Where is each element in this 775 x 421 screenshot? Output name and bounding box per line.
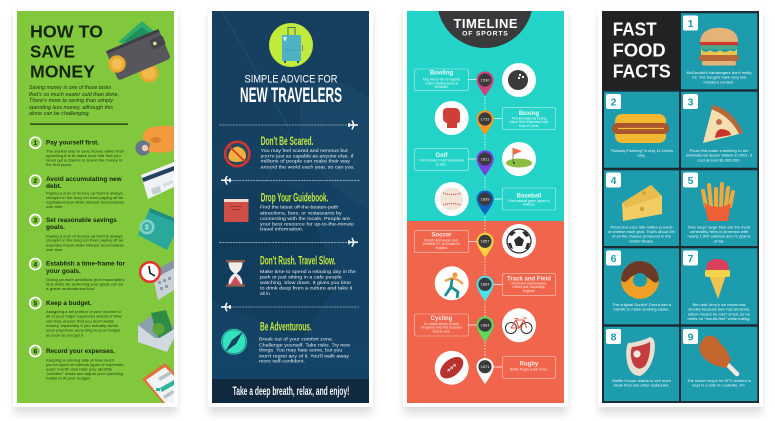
fact 8: steak [604, 327, 679, 401]
event: bowling 1530: Whitehall. [434, 85, 449, 89]
title badge: TIMELINE [454, 16, 518, 31]
tip 4: be adventurous: Challenge yourself. Take risks. Try new [259, 342, 350, 347]
fact 1: burger: McDonald's hamburgers don't really [686, 71, 752, 75]
step 5: 5 [33, 300, 37, 307]
event: soccer 1857: 1857 [481, 239, 490, 244]
fact 3: pizza [681, 92, 757, 168]
fact 6: donut: handle to make dunking easier. [614, 308, 670, 312]
tip 1: don't be scared: Don't Be Scared. [261, 134, 313, 148]
event: baseball 1839: 1839 [481, 196, 490, 201]
event: bowling 1530: 1530 [481, 77, 490, 82]
flight path 1 [219, 120, 358, 130]
fact 2: hot dog: 2 [611, 96, 617, 108]
fact 8: steak: 8 [611, 332, 617, 344]
fact 7: ice cream [681, 248, 757, 324]
step 5: all of your major expenses ahead of time [46, 315, 122, 319]
title: SIMPLE ADVICE FOR [244, 74, 338, 86]
fact 9: chicken: kept in a safe in Louisville, KY. [692, 384, 746, 388]
fact 3: pizza: cost around $1,000,000. [698, 158, 740, 162]
fact 4: cheese: 4 [611, 175, 617, 187]
tip 1: don't be scared [261, 134, 355, 170]
event: baseball 1839 [435, 182, 556, 216]
event: golf 1811: 1811 [481, 156, 490, 161]
tip 3: don't rush: park or just sitting in a cafe people [260, 274, 343, 279]
icon: compass [221, 328, 247, 355]
step 3: over time. [46, 248, 63, 252]
event: cycling 1864: Cycling [431, 316, 453, 322]
step 4: your goals. [46, 268, 81, 275]
step 3: Paying a sum of money up-front is always [46, 234, 123, 238]
fact 5: fries: unhealthy fries in America with [690, 230, 748, 234]
fact 3: pizza: Pizza Hut made a delivery to the [690, 149, 748, 153]
event: rugby 1871 [435, 351, 556, 385]
panel: how to save money [13, 7, 178, 407]
icon: money folder [138, 208, 174, 250]
step 5: can help ensure that you don't waste [46, 319, 114, 323]
event: bowling 1530: King Henry VIII of England [423, 77, 461, 81]
step 3: cheaper in the long run than paying off an [46, 239, 123, 243]
step 5: money, especially if you actually divide [46, 324, 118, 328]
event: track and field 1864: England. [523, 289, 535, 293]
step 3: 3 [33, 217, 37, 224]
fact 4: cheese: of all the cheese produced in the [612, 235, 671, 239]
event: golf 1811: First Women's Golf Tournament [419, 158, 464, 162]
intro text: that's so much easier said than done. [29, 92, 119, 98]
event: track and field 1864: First track meet between [512, 282, 547, 286]
step 1: Pay yourself first. [46, 139, 99, 146]
step 5: each paycheck according to your budget [46, 329, 121, 333]
step 6: habits to fit your budget. [46, 377, 91, 381]
icon: guidebook [224, 199, 248, 222]
fact 5: fries: nearly 1,500 calories and 71 grams [688, 235, 751, 239]
icon: credit card [141, 162, 174, 199]
intro text: There's more to saving than simply [29, 98, 113, 104]
event: soccer 1857 [415, 224, 536, 258]
tip 1: don't be scared: around the world each year, so can you. [261, 165, 355, 170]
event: boxing 1733: Fists of Cards. [519, 124, 539, 128]
step 3 [30, 214, 124, 252]
event: rugby 1871: 1871 [481, 364, 490, 369]
tip 2: drop your guidebook: your best resource for up-to-the-minute [260, 221, 355, 226]
event: soccer 1857: England. [435, 246, 448, 250]
event: golf 1811: in 1811. [436, 162, 447, 166]
title: MONEY [30, 61, 95, 81]
event: boxing 1733: 1733 [481, 116, 490, 121]
step 4: a great motivational tool. [46, 287, 96, 291]
tip 1: don't be scared: millions of people can make their way [261, 159, 351, 164]
intro text: Saving money is one of those tasks [29, 85, 111, 91]
flight path 2 [221, 176, 360, 185]
step 1: spending it is to make sure that that you [46, 154, 121, 158]
step 6: "problem" areas and adjust your spending [46, 372, 123, 376]
event: track and field 1864 [435, 266, 556, 301]
fact 9: chicken: The secret recipe for KFC chicken is [687, 379, 751, 383]
fact 3: pizza: 3 [688, 96, 694, 108]
step 1 [30, 137, 124, 167]
fact 9: chicken [681, 327, 757, 401]
icon: hand with coin [135, 126, 174, 156]
step 6: 6 [33, 348, 37, 355]
event: track and field 1864: 1864 [481, 282, 490, 287]
step 1: never get a chance to spend the money in [46, 159, 122, 163]
step 5: Keep a budget. [46, 300, 92, 307]
panel: advice for new travelers [208, 7, 373, 407]
step 6: each month can help you identify [46, 367, 112, 371]
fact 5: fries: 5 [688, 175, 694, 187]
event: cycling 1864: 1864 [481, 322, 490, 327]
fact 6: donut [604, 248, 679, 324]
event: golf 1811: Golf [436, 153, 448, 159]
fact 7: ice cream: which means he can't smell, so he [688, 312, 750, 316]
flight path 4 [221, 303, 359, 311]
step 2: Paying a sum of money up-front is always [46, 192, 123, 196]
title [240, 74, 342, 107]
icon: clock and calendar [140, 260, 174, 300]
title: SAVE [30, 41, 75, 61]
icon: hourglass [226, 260, 245, 287]
step 4: 4 [33, 261, 37, 268]
icon: money folder: $ [145, 224, 149, 232]
event: rugby 1871: British Rugby Union forms. [510, 368, 548, 372]
step 2: Avoid accumulating new [46, 176, 122, 183]
step 4 [30, 258, 126, 291]
step 2: debt. [46, 183, 62, 190]
tip 4: be adventurous: things. You may hate some, but you [259, 348, 342, 353]
fact 5: fries: Five Guys' large fries are the most [688, 225, 750, 229]
event: rugby 1871: Rugby [520, 361, 539, 367]
fact 4: cheese: of cheese each year. That's about 3% [608, 230, 676, 234]
event: bowling 1530: orders bowling lanes at [425, 81, 458, 85]
event: track and field 1864: Oxford and Cambridge, [512, 285, 546, 289]
title: FAST [613, 20, 657, 40]
fact 7: ice cream: 7 [688, 253, 694, 265]
event: cycling 1864 [415, 308, 536, 342]
fact 2: hot dog: long. [638, 154, 646, 158]
step 6: Keeping a running tally of how much [46, 358, 114, 362]
fact 1: burger: rot. The burgers have very low [692, 76, 746, 80]
intro text [29, 85, 119, 117]
title: FOOD [613, 41, 666, 61]
title badge: OF SPORTS [462, 30, 508, 37]
intro text: spending less money, although this [29, 105, 113, 111]
step 2: over time. [46, 205, 63, 209]
step 2 [30, 175, 124, 209]
event: boxing 1733 [435, 101, 556, 135]
icon: wallet [106, 21, 172, 82]
fact 8: steak: steak than any other restaurant. [614, 384, 670, 388]
step 4: Giving yourself ambitious (but reasonable) [46, 278, 125, 282]
fact 7: ice cream: chunks because Ben has anosmia, [688, 308, 750, 312]
event: boxing 1733: match: Bell-Whitehead bout, [509, 120, 549, 124]
panel: timeline of sports [403, 7, 568, 407]
event: cycling 1864: bicycle race. [433, 330, 450, 334]
fact 6: donut: 6 [611, 253, 617, 265]
step 1: the first place. [46, 163, 72, 167]
tip 3: don't rush: all in. [260, 291, 271, 296]
event: soccer 1857: Soccer [431, 233, 452, 239]
fact 3: pizza: International Space Station in 2001. It [686, 154, 752, 158]
step 4: Establish a time-frame for [46, 260, 126, 267]
fact 4: cheese: United States. [629, 239, 654, 243]
tip 1: don't be scared: you're just as capable as anyone else. If [261, 153, 354, 158]
tip 2: drop your guidebook [260, 191, 355, 232]
tip 3: don't rush: watching. Slow down. It gives you time [260, 280, 352, 285]
tip 3: don't rush: to drink deep from a culture and take it [260, 286, 353, 291]
step 3: equivalent loan while interest accumulates [46, 243, 124, 247]
event: baseball 1839: America. [523, 203, 535, 207]
fact 4: cheese [604, 170, 679, 246]
step 6: you've spent on various types of expenses [46, 363, 123, 367]
event: soccer 1857: Sheffield FC, is founded in [423, 242, 460, 246]
title badge [437, 0, 533, 48]
step 1: 1 [33, 140, 37, 147]
step 3: goals. [46, 224, 65, 231]
step 1: The easiest way to save money rather than [46, 150, 124, 154]
step 5 [30, 298, 122, 338]
fact 5: fries [681, 170, 757, 246]
step 6: Record your expenses. [46, 348, 115, 355]
step 5: Assigning a set portion of your income to [46, 310, 121, 314]
fact 4: cheese: Pizza Hut uses 300 million pounds [610, 225, 673, 229]
icon: no fear [225, 142, 250, 166]
title [30, 21, 103, 81]
fact 8: steak: Waffle House claims to sell more [612, 379, 671, 383]
tip 2: drop your guidebook: attractions, bars, or restaurants by [260, 211, 343, 216]
event: baseball 1839: Baseball [517, 194, 542, 200]
tip 3: don't rush: Make time to spend a relaxing day in the [260, 269, 357, 274]
icon: envelope with cash [138, 310, 174, 352]
event: golf 1811 [415, 142, 536, 176]
step 2: cheaper in the long run than paying off an [46, 196, 123, 200]
footer banner [212, 379, 369, 403]
event: bowling 1530 [415, 63, 536, 97]
intro text: alone can be challenging. [29, 111, 90, 117]
icon: clipboard [142, 363, 174, 403]
tip 4: be adventurous: Be Adventurous. [260, 320, 312, 334]
fact 7: ice cream: Ben and Jerry's ice cream has [692, 303, 746, 307]
title: HOW TO [30, 21, 103, 41]
title: FACTS [613, 62, 671, 82]
fact 5: fries: of fat. [714, 239, 724, 243]
fact 1: burger: moisture content. [704, 80, 734, 84]
step 2: equivalent loan while interest accumulates [46, 200, 124, 204]
tip 4: be adventurous [259, 320, 350, 364]
step 5: as soon as you get it. [46, 334, 84, 338]
tip 4: be adventurous: won't regret any of it. You'll walk away [259, 353, 350, 358]
event: soccer 1857: World's first soccer club, [424, 238, 459, 242]
event: cycling 1864: Dr James Moore (United [424, 322, 459, 326]
icon: suitcase badge [269, 23, 313, 67]
event: boxing 1733: Boxing [519, 111, 539, 117]
tip 4: be adventurous: more self-confident. [259, 359, 305, 364]
event: bowling 1530: Bowling [430, 71, 453, 77]
tip 2: drop your guidebook: connecting with the locals. People are [260, 216, 351, 221]
step 3: Set reasonable savings [46, 217, 117, 224]
fact 6: donut: The original Dunkin' Donut had a [612, 303, 672, 307]
event: track and field 1864: Track and Field [507, 276, 551, 282]
step 4: time limits for achieving your goals can be [46, 282, 123, 286]
fact 9: chicken: 9 [688, 332, 694, 344]
fact 2: hot dog [604, 92, 679, 168]
tip 4: be adventurous: Break out of your comfort zone. [259, 337, 333, 342]
tip 2: drop your guidebook: travel information. [260, 227, 303, 232]
tip 1: don't be scared: You may feel scared and nervous but [261, 148, 349, 153]
step 6 [30, 346, 123, 381]
tip 3: don't rush [260, 253, 357, 296]
title [613, 20, 671, 82]
event: cycling 1864: Kingdom) wins first recorded [421, 326, 462, 330]
flight path 3 [219, 238, 358, 247]
step 2: 2 [33, 178, 37, 185]
tip 2: drop your guidebook: Find the latest off-the-beaten-path [260, 204, 339, 209]
fact 1: burger [681, 13, 757, 89]
fact 1: burger: 1 [688, 18, 694, 30]
event: baseball 1839: First baseball game played in [508, 199, 550, 203]
fact 7: ice cream: relies on "mouth-feel" while eating. [688, 317, 750, 321]
event: boxing 1733: First international boxing [512, 116, 547, 120]
fact 2: hot dog: "Subway Footlong" is only 11 inches [610, 149, 673, 153]
panel: fast food facts [598, 7, 763, 407]
